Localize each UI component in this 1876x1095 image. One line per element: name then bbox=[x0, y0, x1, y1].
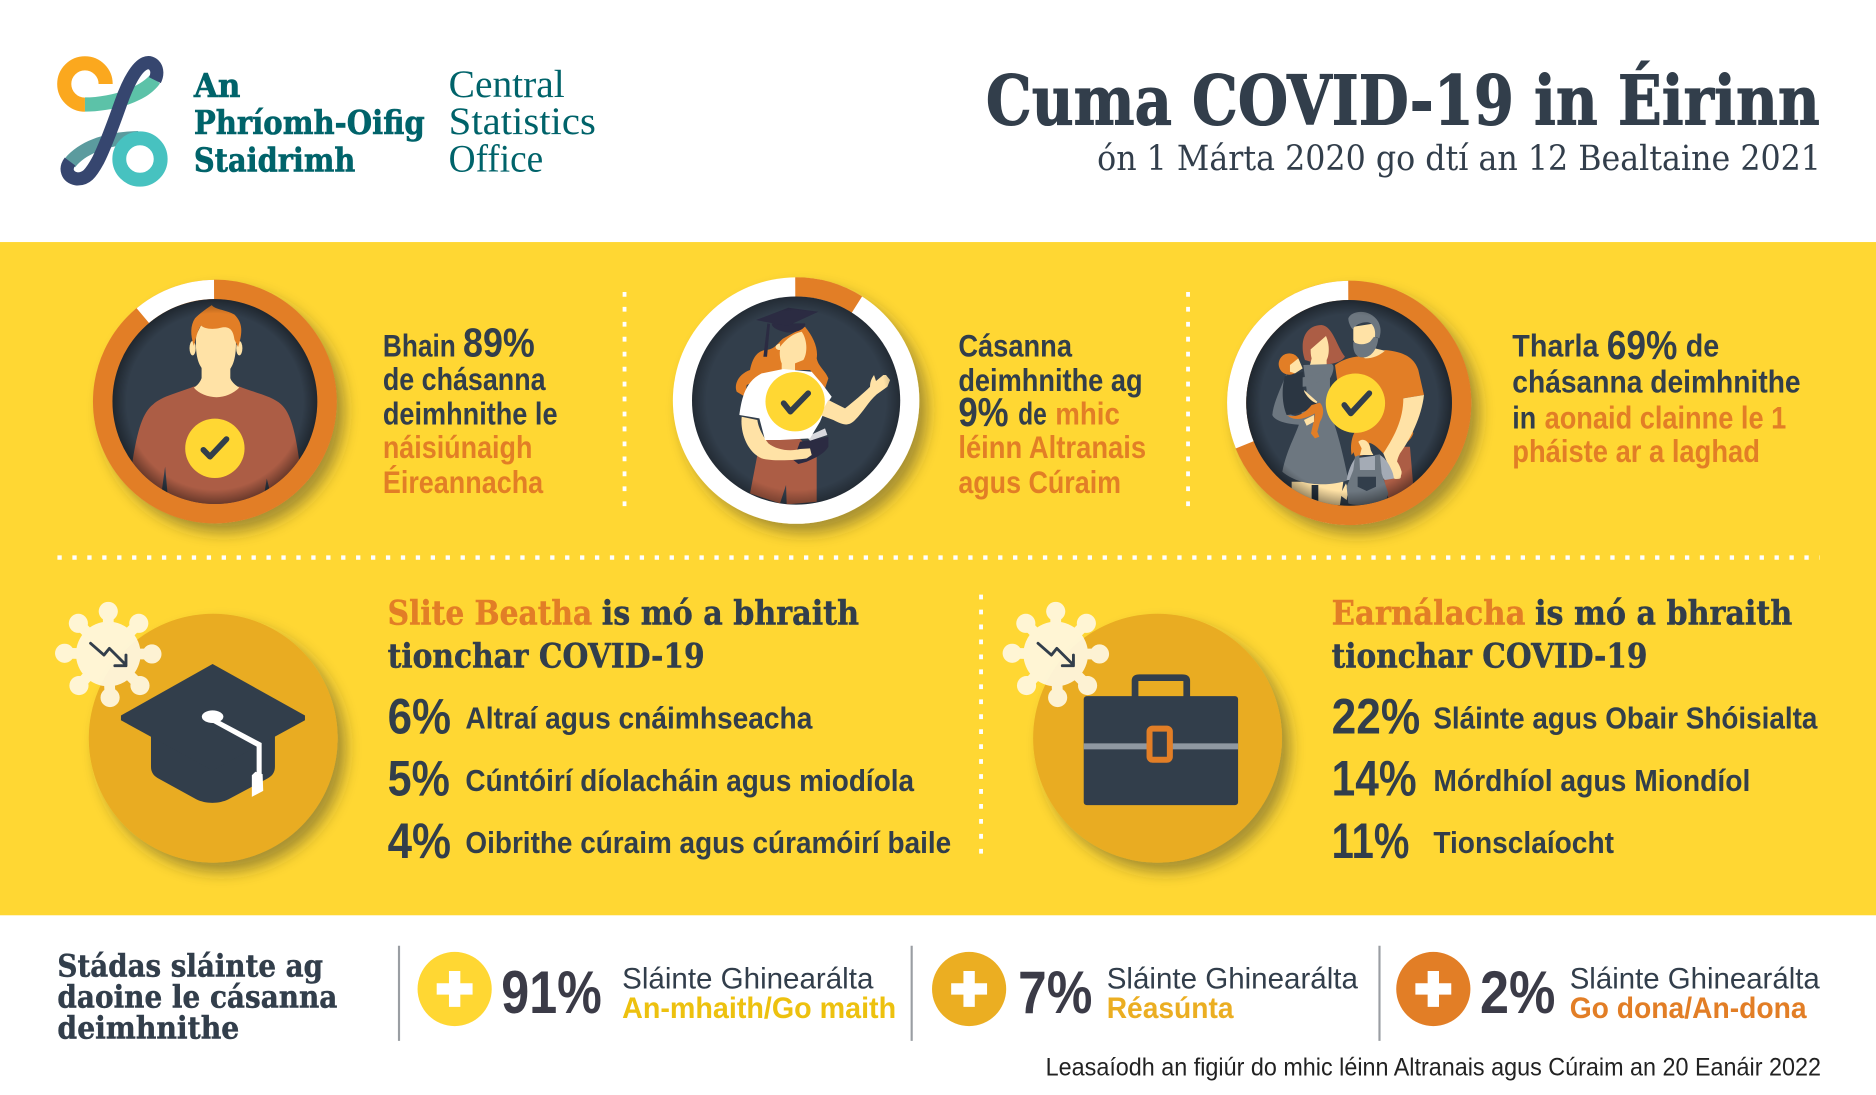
stat: bad health 2%: Sláinte Ghinearálta bbox=[1570, 962, 1820, 995]
panel: sectors icon bbox=[1003, 602, 1282, 863]
text: nationals: Bhain bbox=[383, 329, 456, 364]
text: nationals: 89% bbox=[463, 320, 535, 366]
text: students bbox=[958, 329, 1146, 500]
heading: is mó a bhraith bbox=[602, 594, 859, 634]
separators bbox=[399, 946, 1379, 1041]
stat: fair health 7%: Sláinte Ghinearálta bbox=[1107, 962, 1358, 995]
stat: fair health 7%: 7% bbox=[1018, 959, 1092, 1026]
text: households: chásanna deimhnithe bbox=[1512, 364, 1801, 399]
list: 4% bbox=[388, 813, 451, 869]
text: students: léinn Altranais bbox=[958, 430, 1146, 465]
heading: health status: daoine le cásanna bbox=[57, 979, 338, 1015]
list bbox=[1332, 688, 1818, 869]
list: Tionsclaíocht bbox=[1433, 826, 1614, 860]
text: households: Tharla bbox=[1512, 329, 1599, 364]
panel: nationals 89% donut bbox=[93, 280, 337, 523]
icon: check badge bbox=[1326, 374, 1385, 433]
logo mark bbox=[64, 63, 161, 180]
text: households: pháiste ar a laghad bbox=[1512, 434, 1760, 469]
logo Irish name: Staidrimh bbox=[194, 142, 355, 180]
heading: Earnálacha bbox=[1332, 594, 1525, 634]
icon: plus bbox=[932, 952, 1006, 1026]
text: students: mhic bbox=[1055, 397, 1120, 432]
logo English name bbox=[449, 62, 596, 181]
icon: virus with falling trend bbox=[55, 602, 162, 707]
text: students: agus Cúraim bbox=[958, 465, 1121, 500]
heading bbox=[1332, 594, 1792, 677]
stat: good health 91%: Sláinte Ghinearálta bbox=[622, 962, 874, 995]
logo English name: Statistics bbox=[449, 99, 596, 143]
text: households: in bbox=[1512, 400, 1536, 435]
list: Mórdhíol agus Miondíol bbox=[1433, 764, 1750, 798]
stat: good health 91%: An-mhaith/Go maith bbox=[622, 992, 896, 1025]
heading: is mó a bhraith bbox=[1535, 594, 1792, 634]
heading: tionchar COVID-19 bbox=[388, 637, 705, 677]
icon: plus bbox=[1396, 952, 1470, 1026]
text: students: deimhnithe ag bbox=[958, 363, 1143, 398]
list: Sláinte agus Obair Shóisialta bbox=[1433, 702, 1818, 736]
subtitle: ón 1 Márta 2020 go dtí an 12 Bealtaine 2021 bbox=[1097, 139, 1821, 179]
text: households: aonaid clainne le 1 bbox=[1545, 400, 1786, 435]
text: nationals bbox=[383, 320, 558, 500]
panel: households 69% donut bbox=[1227, 281, 1471, 525]
stat: good health 91%: 91% bbox=[501, 959, 602, 1026]
dotted dividers bbox=[57, 292, 1820, 857]
icon: graduation cap bbox=[121, 664, 305, 803]
icon: student bbox=[736, 308, 890, 504]
text: nationals: náisiúnaigh bbox=[383, 430, 532, 465]
list: 6% bbox=[388, 688, 451, 744]
text: households: 69% bbox=[1607, 322, 1677, 368]
text: students: 9% bbox=[958, 389, 1009, 435]
list: 14% bbox=[1332, 751, 1417, 807]
heading: health status: deimhnithe bbox=[57, 1011, 239, 1047]
stat: fair health 7% bbox=[932, 952, 1358, 1026]
list bbox=[388, 688, 951, 869]
panel: students 9% donut bbox=[673, 277, 919, 524]
logo Irish name: An bbox=[193, 67, 240, 105]
list: Altraí agus cnáimhseacha bbox=[465, 702, 813, 736]
stat: bad health 2% bbox=[1396, 952, 1820, 1026]
text: households bbox=[1512, 322, 1801, 469]
stat: fair health 7%: Réasúnta bbox=[1107, 992, 1234, 1025]
text: households: de bbox=[1686, 329, 1719, 364]
list: 22% bbox=[1332, 688, 1420, 744]
icon: check badge bbox=[765, 372, 825, 431]
text: students: de bbox=[1018, 397, 1047, 432]
text: students: Cásanna bbox=[958, 329, 1073, 364]
panel: occupations icon bbox=[55, 602, 338, 863]
stat: bad health 2%: 2% bbox=[1480, 959, 1555, 1026]
icon: virus with falling trend bbox=[1003, 602, 1109, 707]
yellow main panel bbox=[0, 242, 1876, 915]
logo English name: Office bbox=[449, 137, 543, 181]
list: Oibrithe cúraim agus cúramóirí baile bbox=[465, 826, 951, 860]
text: sectors bbox=[1332, 594, 1818, 869]
text: nationals: Éireannacha bbox=[383, 465, 544, 500]
icon: check badge bbox=[185, 419, 245, 478]
heading: Slite Beatha bbox=[388, 594, 592, 634]
text: occupations bbox=[388, 594, 951, 869]
list: 5% bbox=[388, 751, 450, 807]
logo English name: Central bbox=[449, 62, 565, 106]
icon: plus bbox=[418, 952, 492, 1026]
stat: bad health 2%: Go dona/An-dona bbox=[1570, 992, 1807, 1025]
heading: tionchar COVID-19 bbox=[1332, 637, 1647, 677]
logo Irish name bbox=[193, 67, 425, 180]
text: nationals: de chásanna bbox=[383, 362, 546, 397]
logo: Central Statistics Office bbox=[64, 62, 596, 181]
logo Irish name: Phríomh-Oifig bbox=[194, 104, 425, 142]
list: 11% bbox=[1332, 813, 1409, 869]
footnote: Leasaíodh an figiúr do mhic léinn Altranais agus Cúraim an 20 Eanáir 2022 bbox=[1046, 1055, 1821, 1082]
icon: family bbox=[1272, 312, 1424, 505]
heading: health status bbox=[57, 948, 338, 1047]
list: Cúntóirí díolacháin agus miodíola bbox=[465, 764, 915, 798]
icon: briefcase bbox=[1084, 678, 1238, 805]
text: nationals: deimhnithe le bbox=[383, 397, 558, 432]
heading: health status: Stádas sláinte ag bbox=[57, 948, 323, 984]
icon: man bbox=[132, 305, 299, 504]
heading bbox=[388, 594, 859, 677]
title bbox=[986, 61, 1821, 179]
stat: good health 91% bbox=[418, 952, 896, 1026]
